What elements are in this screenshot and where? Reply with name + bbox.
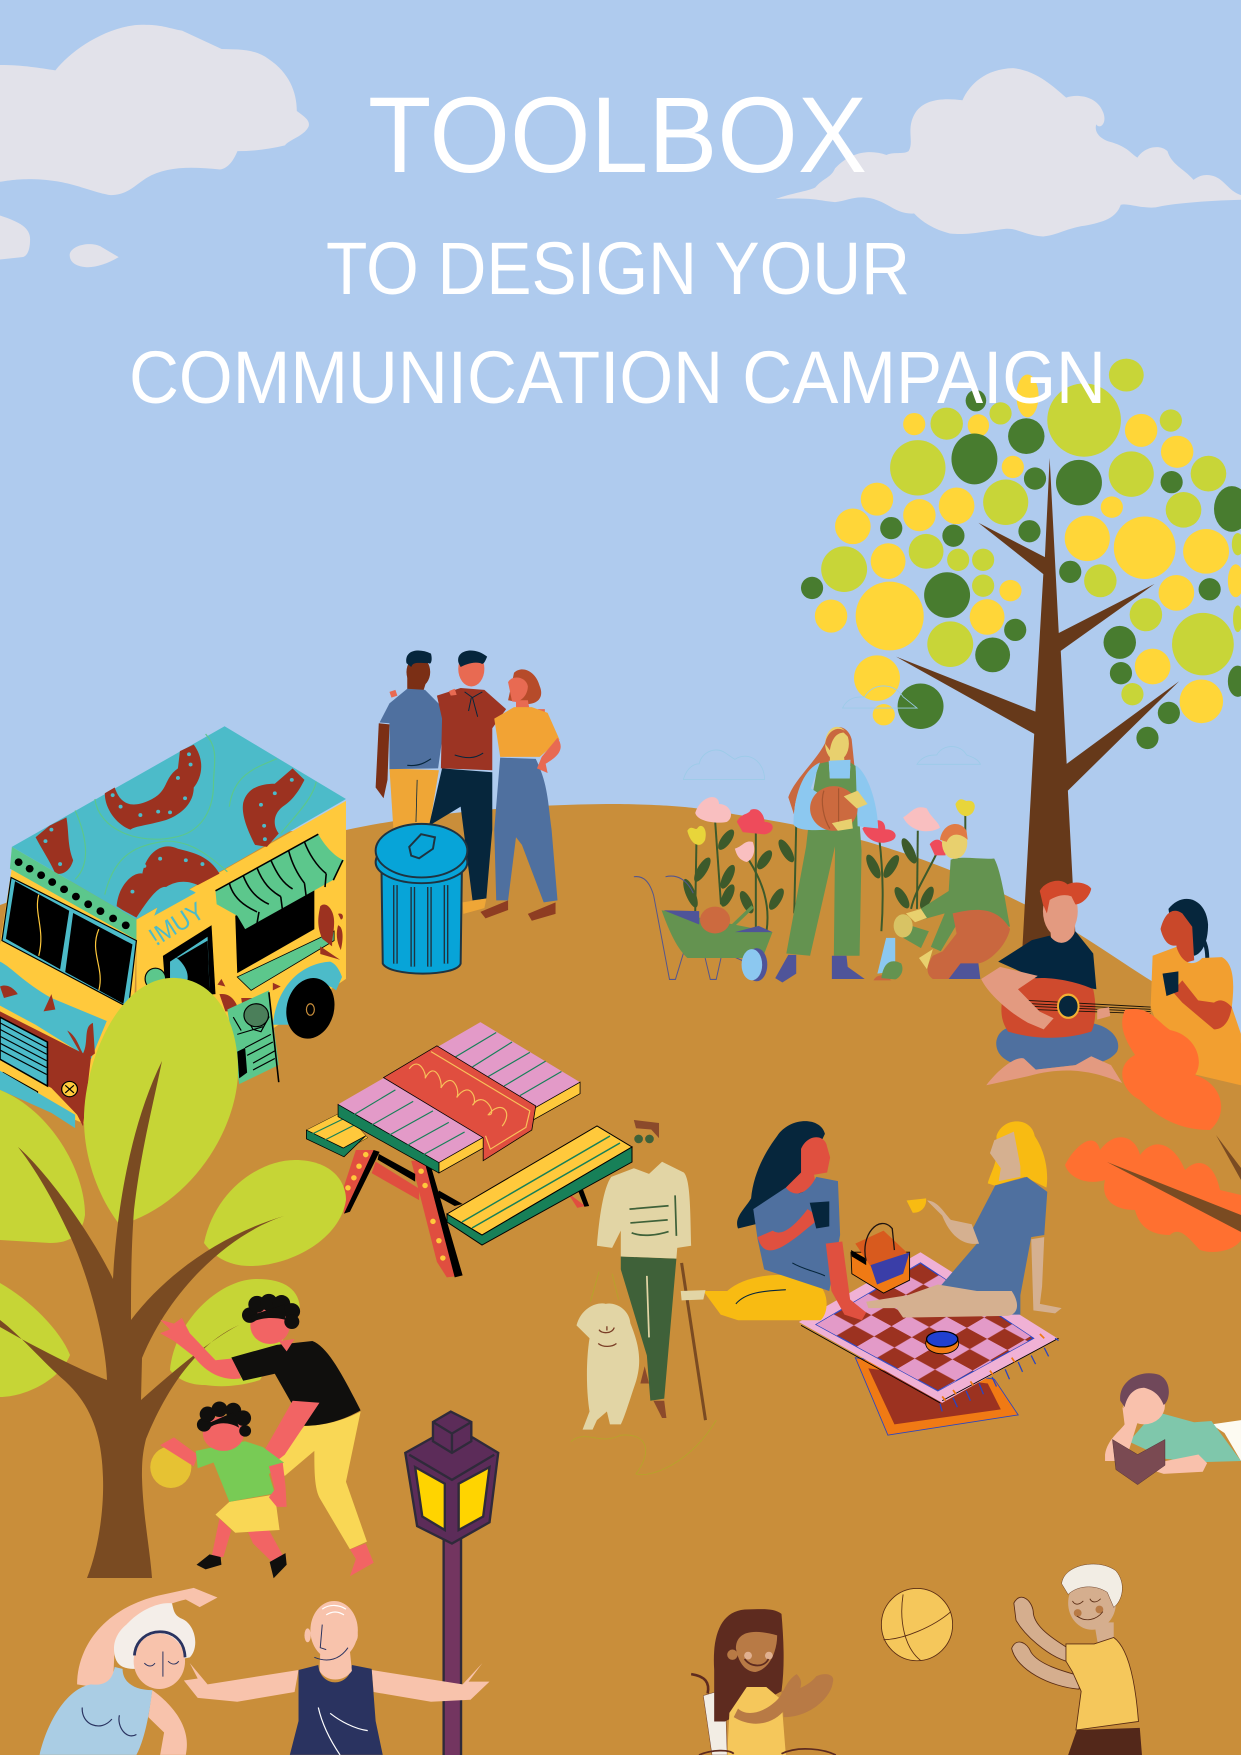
- subtitle line 2: COMMUNICATION CAMPAIGN: [129, 336, 1106, 419]
- father playing: [160, 1294, 374, 1576]
- truck roof: [12, 726, 346, 920]
- truck front grille: [0, 962, 107, 1059]
- friend: man in blue: [376, 651, 446, 830]
- group of three friends: [376, 650, 561, 921]
- awning: [215, 834, 344, 929]
- wheelbarrow: [634, 876, 772, 981]
- guide dog: [571, 1272, 716, 1475]
- branch over leaf: [1107, 1162, 1241, 1232]
- truck wheel: [273, 962, 342, 1025]
- title: toolbox: TOOLBOX: [368, 74, 867, 195]
- son with ball: [150, 1402, 287, 1578]
- tree leaves: [0, 978, 346, 1397]
- title block: [129, 74, 1106, 419]
- orange autumn leaves: [1065, 1009, 1241, 1252]
- picnic blanket: [799, 1252, 1059, 1435]
- leaf bottom: [1065, 1137, 1241, 1252]
- menu sign: [227, 990, 279, 1084]
- man watering plants: [873, 824, 1010, 980]
- boy reading: [1105, 1373, 1241, 1485]
- left bench: [306, 1111, 368, 1151]
- subtitle line 1: TO DESIGN YOUR: [326, 227, 910, 310]
- flowers: [680, 797, 975, 931]
- grandpa stretching: [184, 1601, 490, 1755]
- serving window: [235, 872, 314, 973]
- gardening scene: [634, 686, 1010, 983]
- outline clouds: [683, 686, 980, 779]
- street lamp: [405, 1412, 498, 1755]
- grandma stretching: [40, 1588, 217, 1755]
- woman with pumpkin: [775, 727, 878, 983]
- food truck: [0, 726, 346, 1128]
- girl in wheelchair: [691, 1609, 836, 1755]
- tree foliage: [801, 375, 1241, 749]
- truck windshield band: [10, 847, 136, 940]
- boy catching ball: [1012, 1564, 1142, 1755]
- picnic table: [306, 1022, 632, 1277]
- tree foliage top: [966, 359, 1144, 411]
- ball: [881, 1588, 953, 1661]
- people in lower right: [571, 1120, 1241, 1755]
- woman with dark hair: [681, 1121, 866, 1320]
- windshield: [2, 877, 136, 1008]
- truck side: [136, 801, 346, 1098]
- truck side decoration: [318, 904, 343, 960]
- branch: [1216, 1135, 1241, 1180]
- left tree: [0, 978, 346, 1578]
- guitar player and friend: [981, 881, 1241, 1085]
- friend: man in red: [389, 650, 545, 914]
- leaf top: [1122, 1009, 1221, 1130]
- table frame: [343, 1150, 589, 1277]
- right tree: [801, 359, 1241, 949]
- woman with blonde hair: [866, 1121, 1062, 1318]
- table top: [338, 1022, 580, 1163]
- guitarist: [981, 881, 1151, 1085]
- tree trunk: [0, 1061, 284, 1578]
- ground hill: [0, 804, 1241, 1755]
- table cloth: [384, 1046, 536, 1161]
- friend: woman in yellow: [480, 669, 561, 921]
- woman with mug: [1151, 899, 1241, 1085]
- truck front: [0, 868, 136, 1126]
- picnic basket: [851, 1224, 910, 1293]
- truck lettering: !MUY: [144, 898, 210, 952]
- right bench: [447, 1126, 632, 1245]
- roof pattern: [36, 745, 304, 918]
- truck door: [163, 925, 215, 998]
- tree trunk: [896, 458, 1179, 949]
- man with cane: [597, 1120, 705, 1420]
- trash bin: [376, 824, 467, 974]
- clouds: [0, 25, 1241, 267]
